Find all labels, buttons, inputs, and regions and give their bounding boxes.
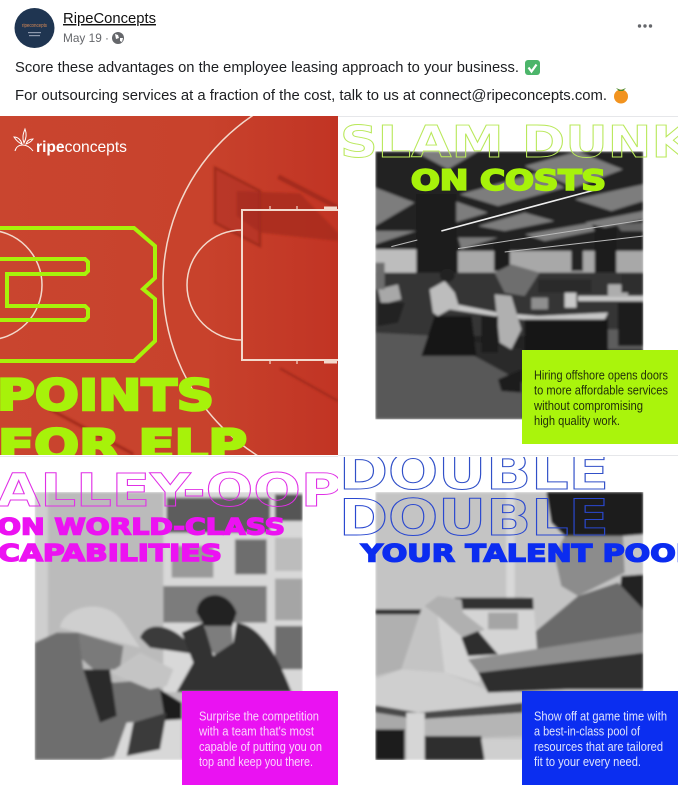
heading: double outline bottom: DOUBLE — [339, 489, 609, 547]
logo — [14, 129, 127, 156]
court lines — [0, 116, 338, 455]
heading: on costs: ON COSTS — [411, 164, 606, 196]
heading: double outline top: DOUBLE — [339, 443, 609, 501]
post header — [14, 8, 652, 104]
avatar: ripeconcepts — [22, 23, 47, 29]
icon: orange emoji — [614, 88, 628, 104]
callout text: capable of putting you on — [199, 739, 322, 754]
panel: slam dunk on costs — [340, 117, 678, 444]
post date: May 19 · — [63, 31, 109, 45]
callout box — [522, 691, 678, 785]
panel: alley-oop on world-class capabilities — [0, 464, 342, 785]
icon: check mark emoji — [525, 60, 540, 75]
callout text: top and keep you there. — [199, 754, 313, 769]
logo wordmark: ripeconcepts — [36, 139, 127, 156]
heading: alley-oop outline: ALLEY-OOP — [0, 464, 342, 517]
icon: more options — [638, 24, 652, 28]
panel: 3 points for ELP — [0, 116, 338, 455]
callout text — [198, 708, 322, 769]
callout text: without compromising — [533, 398, 643, 413]
callout box — [522, 350, 678, 444]
court background — [0, 116, 338, 455]
page name: RipeConcepts — [63, 11, 156, 27]
icon: logo leaves — [14, 129, 33, 151]
heading: on world-class: ON WORLD-CLASS — [0, 514, 285, 540]
callout text — [534, 708, 667, 769]
callout text — [533, 368, 668, 428]
team photo — [35, 492, 303, 760]
callout box — [182, 691, 338, 785]
post message line 2: For outsourcing services at a fraction of the cost, talk to us at connect@ripeconcepts.com. — [15, 88, 607, 104]
heading: points: POINTS — [0, 371, 214, 421]
callout text: a best-in-class pool of — [534, 724, 640, 738]
panel: double double your talent pool — [339, 443, 678, 785]
office photo — [375, 151, 643, 419]
numeral 3 outline — [0, 228, 155, 361]
callout text: fit to your every need. — [534, 754, 641, 769]
heading: slam dunk outline: SLAM DUNK — [340, 117, 678, 168]
laptop photo — [375, 492, 643, 760]
post message line 1: Score these advantages on the employee leasing approach to your business. — [15, 60, 519, 76]
heading: capabilities: CAPABILITIES — [0, 539, 222, 567]
heading: your talent pool: YOUR TALENT POOL — [360, 540, 678, 568]
icon: globe — [112, 32, 124, 44]
court shadows — [50, 168, 338, 454]
callout text: high quality work. — [534, 413, 620, 428]
callout text: with a team that's most — [198, 724, 314, 738]
callout text: Surprise the competition — [199, 708, 319, 724]
heading: for ELP: FOR ELP — [0, 421, 247, 471]
avatar — [14, 8, 54, 48]
